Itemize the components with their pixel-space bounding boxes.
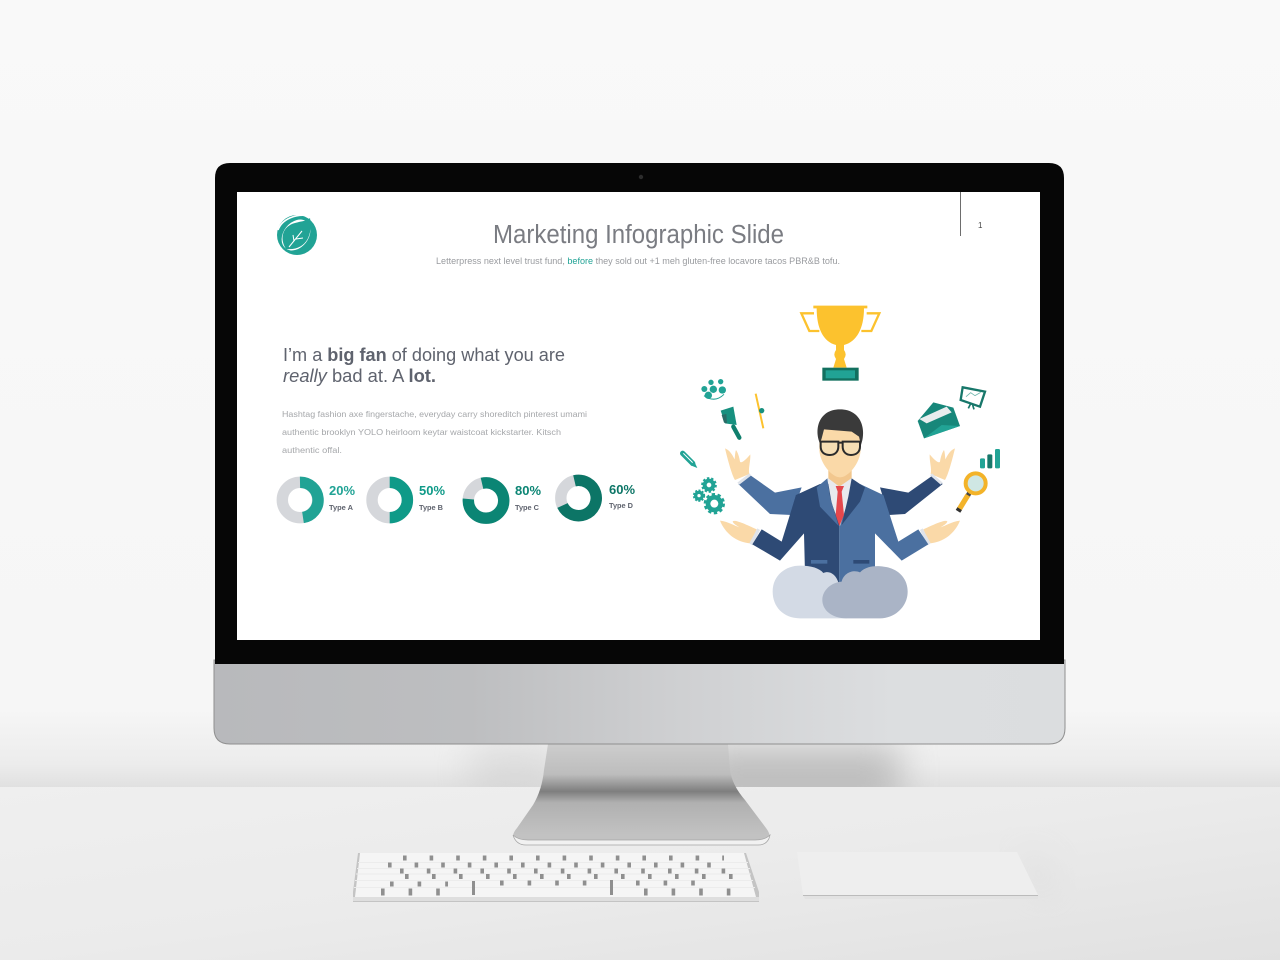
trackpad <box>797 852 1060 899</box>
donut: type C: Type C <box>515 503 540 512</box>
heading: really bad at. A lot. <box>283 365 436 386</box>
donut: type A <box>282 482 355 518</box>
person <box>720 409 960 583</box>
donut: type C: 80% <box>515 484 541 498</box>
back arm right <box>880 475 943 515</box>
donut: type B <box>372 482 445 518</box>
monitor bezel <box>215 163 1064 664</box>
donut: type B: 50% <box>419 484 445 498</box>
torso <box>783 483 839 583</box>
hair <box>818 409 863 445</box>
subtitle: Letterpress next level trust fund, before they sold out +1 meh gluten-free locavore tacos PBR&B tofu. <box>436 256 840 266</box>
front arm right <box>870 495 928 561</box>
front arm left <box>752 495 810 561</box>
tie <box>836 486 844 526</box>
glasses <box>821 442 860 455</box>
donut: type A: 20% <box>329 484 355 498</box>
heading <box>283 344 565 386</box>
logo <box>276 214 317 256</box>
page number <box>960 192 983 236</box>
body text: authentic offal. <box>282 445 342 455</box>
illustration: businessman with trophy and icons <box>683 306 1000 618</box>
icon: presentation board <box>961 387 985 409</box>
monitor chin <box>214 660 1065 744</box>
icon: bar chart <box>980 449 1000 468</box>
monitor stand <box>513 744 770 845</box>
lapels <box>817 478 839 526</box>
donut: type D: Type D <box>609 501 634 510</box>
page number: 1 <box>978 221 983 230</box>
icon: pencil <box>683 453 697 468</box>
keyboard <box>353 853 759 902</box>
face <box>819 427 861 477</box>
hands <box>720 448 960 543</box>
camera <box>639 175 643 179</box>
donut: type D: 60% <box>609 483 635 497</box>
body text: Hashtag fashion axe fingerstache, everyday carry shoreditch pinterest umami <box>282 409 587 419</box>
cuffs <box>737 473 943 545</box>
donut: type B: Type B <box>419 503 444 512</box>
slide screen <box>237 192 1040 640</box>
heading: I’m a big fan of doing what you are <box>283 344 565 365</box>
monitor shadow on wall <box>474 744 915 787</box>
icon: gears <box>694 478 724 513</box>
icon: megaphone <box>721 407 739 438</box>
back arm left <box>738 475 802 515</box>
desk surface <box>0 787 1280 960</box>
icon: envelope <box>918 402 960 438</box>
legs <box>773 566 908 618</box>
title: Marketing Infographic Slide <box>493 221 784 249</box>
neck and shirt <box>828 463 852 487</box>
icon: yellow pointer <box>756 394 764 428</box>
trophy <box>801 306 879 381</box>
icon: people network <box>701 379 726 399</box>
donut: type A: Type A <box>329 503 354 512</box>
donut: type C <box>468 483 541 518</box>
donut: type D <box>561 480 635 516</box>
monitor <box>214 163 1065 744</box>
icon: magnifier <box>958 473 986 511</box>
body text <box>282 409 587 455</box>
body text: authentic brooklyn YOLO heirloom keytar waistcoat kickstarter. Kitsch <box>282 427 561 437</box>
